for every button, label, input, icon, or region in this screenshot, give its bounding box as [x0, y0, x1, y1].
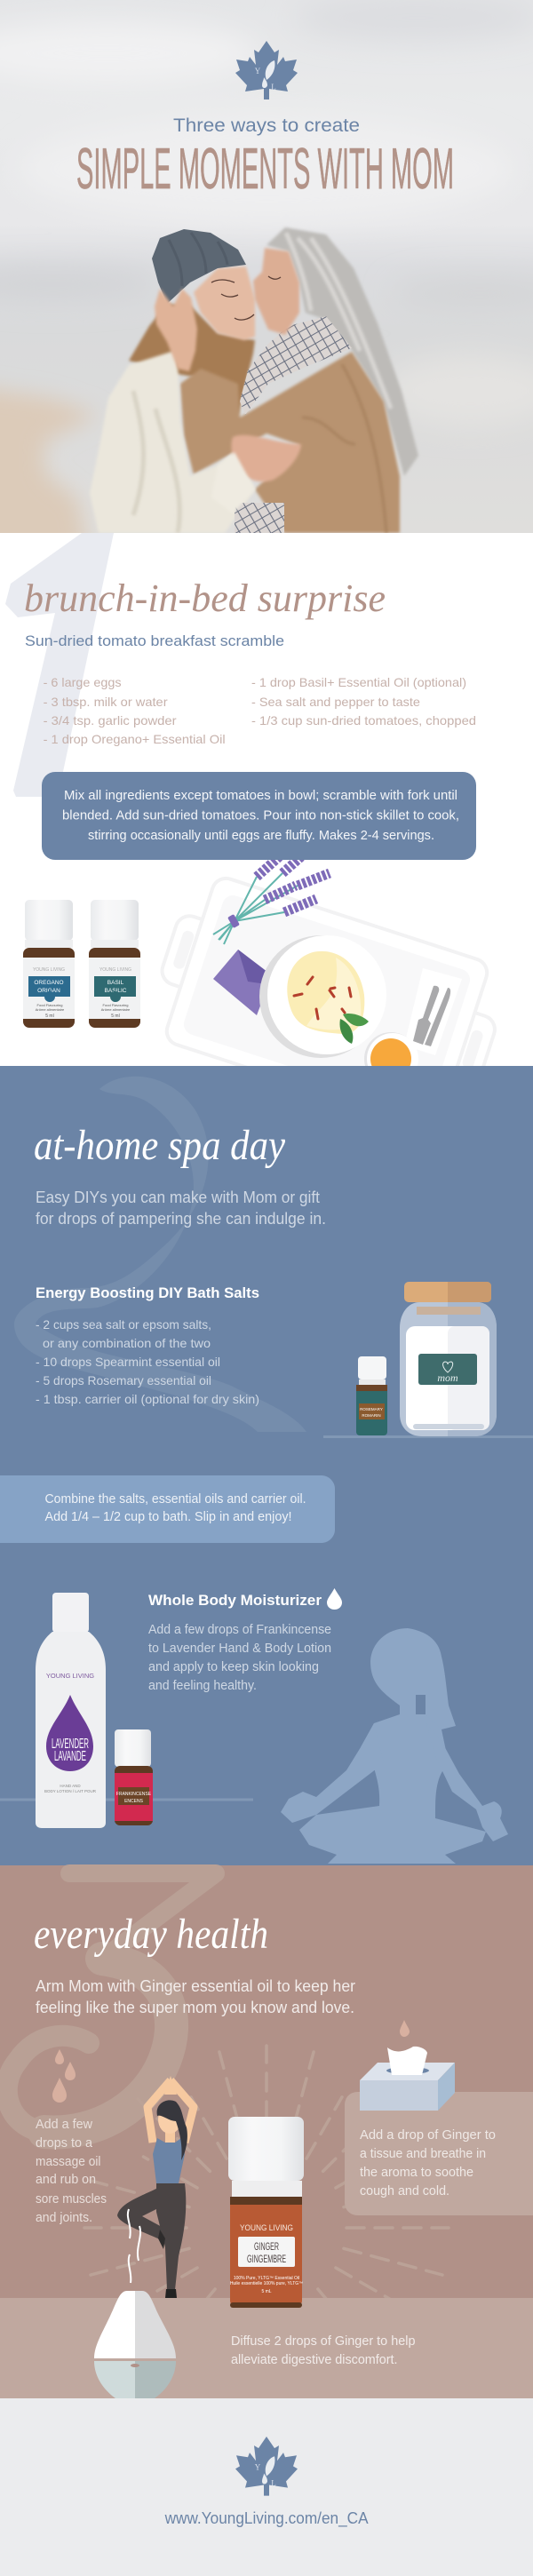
logo: maple leaf: Y [255, 2462, 261, 2471]
callout: method: stirring occasionally until eggs are fluffy. Makes 2-4 servings. [88, 828, 434, 843]
ginger bottle: 100% Pure, YLTG™ Essential Oil [234, 2276, 299, 2281]
ingredient list left [44, 675, 226, 746]
basil leaves [340, 1014, 369, 1044]
bottle: basil: 5 ml [111, 1014, 120, 1019]
daughter's white cardigan [90, 350, 255, 533]
ingredient list right [251, 675, 476, 727]
ginger bottle: 5 mL [261, 2289, 272, 2294]
radiating rays [84, 2046, 449, 2330]
lotion bottle: LAVENDER [52, 1737, 89, 1752]
jar label [418, 1354, 477, 1385]
bottle: oregano: YOUNG LIVING [33, 967, 65, 973]
panel: tissue tip: the aroma to soothe [360, 2166, 473, 2180]
yoga figure [117, 2076, 194, 2298]
rosemary bottle: ROMARIN [362, 1413, 381, 1418]
panel: diffuser tip: alleviate digestive discomfort. [231, 2353, 398, 2367]
jar label: mom [437, 1371, 458, 1384]
bottle: oregano: 5 ml [45, 1014, 54, 1019]
bottle: oregano: OREGANO [34, 980, 64, 986]
callout: combine: Combine the salts, essential oils and carrier oil. [44, 1491, 306, 1507]
bath salts heading: Energy Boosting DIY Bath Salts [36, 1284, 259, 1301]
tissue box [360, 2047, 455, 2111]
fork and knife [413, 986, 450, 1046]
bottle: basil: Arôme alimentaire [101, 1007, 131, 1012]
intro text: Arm Mom with Ginger essential oil to keep her [36, 1977, 355, 1995]
ingredient list left: - 1 drop Oregano+ Essential Oil [44, 732, 226, 746]
massage text: sore muscles [36, 2192, 107, 2206]
envelope [213, 950, 272, 1015]
moisturizer text [148, 1622, 331, 1693]
heading: at-home spa day [34, 1122, 286, 1169]
lotion bottle: LAVANDE [54, 1749, 86, 1764]
website url: www.YoungLiving.com/en_CA [164, 2509, 369, 2528]
panel: diffuser tip: Diffuse 2 drops of Ginger to help [231, 2334, 416, 2349]
moisturizer text: and apply to keep skin looking [148, 1659, 319, 1674]
panel: diffuser tip [0, 2298, 533, 2398]
scarf [240, 316, 352, 415]
bath salts list: or any combination of the two [43, 1336, 211, 1350]
intro text: feeling like the super mom you know and love. [36, 1999, 354, 2016]
ingredient list right: - 1 drop Basil+ Essential Oil (optional) [251, 675, 466, 689]
icon: tissue drop [400, 2020, 410, 2037]
intro text [36, 1189, 326, 1228]
bottle: oregano: Arôme alimentaire [36, 1007, 65, 1012]
lotion bottle: YOUNG LIVING [46, 1672, 94, 1680]
frankincense bottle: ENCENS [124, 1799, 144, 1804]
ingredient list left: - 6 large eggs [44, 675, 122, 689]
massage text: Add a few [36, 2118, 93, 2132]
knit hat [152, 229, 246, 304]
bottle: basil: BASILIC [105, 988, 127, 994]
intro text: for drops of pampering she can indulge in. [36, 1210, 326, 1228]
daughter's hair [129, 304, 255, 415]
bottle: oregano: ORIGAN [37, 988, 60, 994]
callout: combine [0, 1475, 335, 1543]
moisturizer heading: Whole Body Moisturizer [148, 1592, 322, 1609]
logo: maple leaf: L [271, 83, 276, 91]
ginger bottle: YOUNG LIVING [240, 2223, 293, 2232]
orange juice [364, 1032, 418, 1085]
panel: at-home spa day [0, 1066, 533, 1866]
moisturizer text: to Lavender Hand & Body Lotion [148, 1641, 331, 1656]
intro text [36, 1977, 355, 2016]
bath salts list [36, 1317, 259, 1406]
diffuser with steam [94, 2209, 176, 2398]
mother's hair [266, 227, 418, 476]
meditating woman silhouette [281, 1628, 508, 1864]
panel: tissue tip: a tissue and breathe in [360, 2147, 486, 2161]
subtitle line: Three ways to create [173, 115, 360, 136]
panel: tissue tip [345, 2092, 533, 2215]
callout: method: Mix all ingredients except tomatoes in bowl; scramble with fork until [64, 788, 457, 803]
watermark number 2 [14, 1077, 306, 1432]
watermark number 1 [5, 533, 114, 797]
bottle: basil: BASIL [107, 980, 124, 986]
mother's hand on arm [231, 435, 301, 481]
logo: maple leaf [235, 2437, 298, 2496]
callout: method [42, 772, 476, 860]
bath salts list: - 1 tbsp. carrier oil (optional for dry skin) [36, 1392, 259, 1406]
cardigan cuff [227, 451, 251, 513]
logo: maple leaf: Y [255, 67, 261, 76]
massage text [36, 2118, 107, 2225]
intro text: Easy DIYs you can make with Mom or gift [36, 1189, 320, 1206]
shelf [323, 1435, 533, 1438]
moisturizer text: Add a few drops of Frankincense [148, 1622, 331, 1637]
massage text: drops to a [36, 2136, 93, 2151]
heading: everyday health [34, 1911, 268, 1958]
recipe subtitle: Sun-dried tomato breakfast scramble [25, 632, 284, 649]
plate [259, 935, 386, 1058]
napkin [404, 968, 462, 1055]
daughter's hand on head [155, 289, 197, 371]
mother's face [253, 248, 299, 335]
icon: three oil drops [52, 2049, 76, 2103]
panel: tissue tip: Add a drop of Ginger to [360, 2128, 496, 2143]
ingredient list left: - 3 tbsp. milk or water [44, 695, 168, 709]
bath salts list: - 2 cups sea salt or epsom salts, [36, 1317, 211, 1332]
bottle: oregano [23, 900, 75, 1028]
massage text: and joints. [36, 2211, 92, 2225]
icon: water drop [327, 1588, 342, 1610]
ingredient list right: - 1/3 cup sun-dried tomatoes, chopped [251, 713, 476, 727]
jar of bath salts [400, 1282, 497, 1436]
frankincense bottle [115, 1729, 153, 1825]
ginger bottle: GINGEMBRE [247, 2253, 286, 2265]
bottle: basil: YOUNG LIVING [99, 967, 131, 973]
panel: brunch-in-bed surprise [0, 533, 533, 2576]
bottle: basil: Food Flavouring [103, 1003, 128, 1007]
logo: maple leaf: L [271, 2479, 276, 2488]
rosemary bottle [356, 1356, 387, 1435]
lotion bottle [36, 1593, 106, 1828]
massage text: and rub on [36, 2173, 96, 2187]
watermark number 3 [7, 1873, 216, 2132]
ginger bottle: Huile essentielle 100% pure, YLTG™ [230, 2281, 303, 2286]
shelf [0, 1798, 253, 1801]
ingredient list left: - 3/4 tsp. garlic powder [44, 713, 177, 727]
scrambled eggs [287, 951, 364, 1034]
panel: footer [0, 2398, 533, 2576]
rosemary bottle: ROSEMARY [360, 1407, 383, 1411]
title [76, 115, 454, 201]
panel: tissue tip: cough and cold. [360, 2184, 449, 2198]
massage text: massage oil [36, 2155, 101, 2169]
panel: everyday health [0, 1865, 533, 2398]
ingredient list right: - Sea salt and pepper to taste [251, 695, 420, 709]
lotion bottle: HAND AND [60, 1784, 81, 1788]
ginger bottle [228, 2117, 304, 2308]
lotion bottle: BODY LOTION / LAIT POUR [44, 1789, 97, 1793]
bath salts list: - 5 drops Rosemary essential oil [36, 1373, 211, 1387]
bottle: basil [89, 900, 140, 1028]
tray illustration [23, 772, 514, 1137]
heading: brunch-in-bed surprise [24, 576, 386, 620]
bottle: oregano: Food Flavouring [37, 1003, 62, 1007]
moisturizer text: and feeling healthy. [148, 1678, 257, 1693]
mother's tan sweater [180, 352, 400, 533]
bath salts list: - 10 drops Spearmint essential oil [36, 1355, 220, 1369]
daughter's face [194, 266, 255, 340]
callout: method: blended. Add sun-dried tomatoes. Pour into non-stick skillet to cook, [62, 808, 459, 823]
lavender [213, 853, 330, 944]
logo: maple leaf [235, 41, 298, 99]
callout: combine: Add 1/4 – 1/2 cup to bath. Slip in and enjoy! [44, 1509, 291, 1524]
ginger bottle: GINGER [254, 2240, 279, 2253]
eyes and smile [211, 276, 281, 320]
hero photo background [0, 0, 533, 560]
frankincense bottle: FRANKINCENSE [116, 1792, 152, 1797]
